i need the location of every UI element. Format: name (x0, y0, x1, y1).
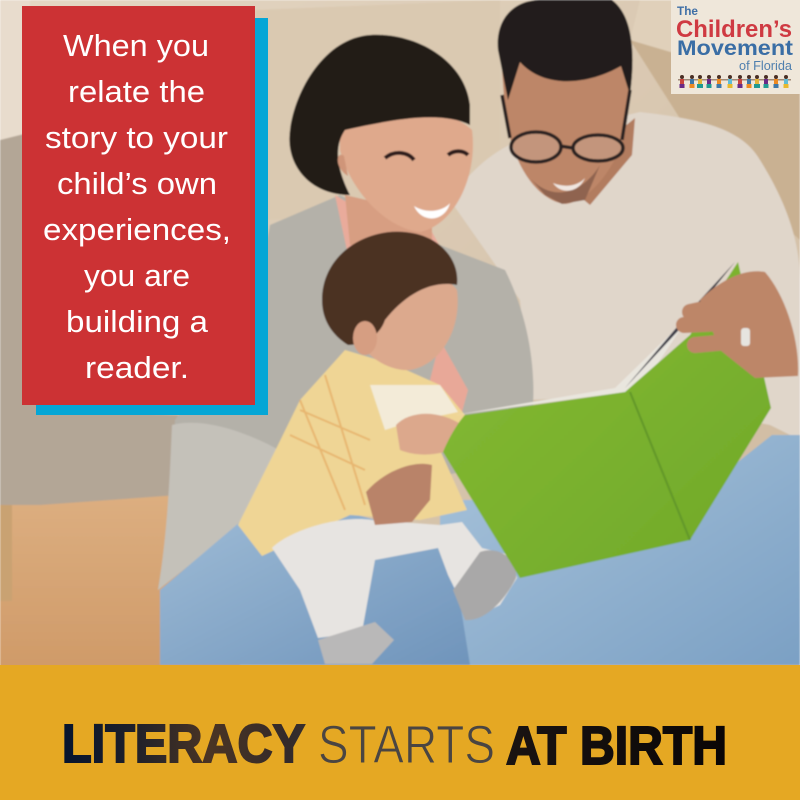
row of paper-doll children (678, 75, 791, 88)
slogan: LITERACY (62, 714, 305, 774)
quote panel (22, 6, 268, 415)
baby (238, 232, 517, 664)
logo: The (677, 4, 698, 18)
slogan: STARTS (318, 715, 495, 775)
slogan (62, 714, 727, 776)
slogan: AT BIRTH (506, 716, 727, 776)
green book (443, 262, 771, 578)
woman jeans (160, 505, 470, 665)
quote text: When you (63, 28, 209, 63)
glasses (502, 90, 630, 162)
woman (158, 35, 533, 590)
quote text: child’s own (57, 166, 217, 201)
bottom band (0, 665, 800, 800)
logo: Movement (677, 37, 793, 60)
man (450, 0, 800, 440)
quote text: experiences, (43, 212, 231, 247)
quote text (43, 28, 231, 385)
quote text: story to your (45, 120, 228, 155)
man jeans (440, 435, 800, 665)
logo (671, 0, 800, 94)
logo: of Florida (739, 58, 793, 73)
blue offset box (36, 18, 268, 415)
quote text: you are (84, 258, 190, 293)
quote text: reader. (85, 350, 189, 385)
floor (0, 495, 240, 670)
left sofa (0, 130, 178, 601)
red box (22, 6, 255, 405)
quote text: relate the (68, 74, 205, 109)
man's hand (684, 271, 798, 378)
logo: Children’s (676, 16, 792, 43)
quote text: building a (66, 304, 209, 339)
